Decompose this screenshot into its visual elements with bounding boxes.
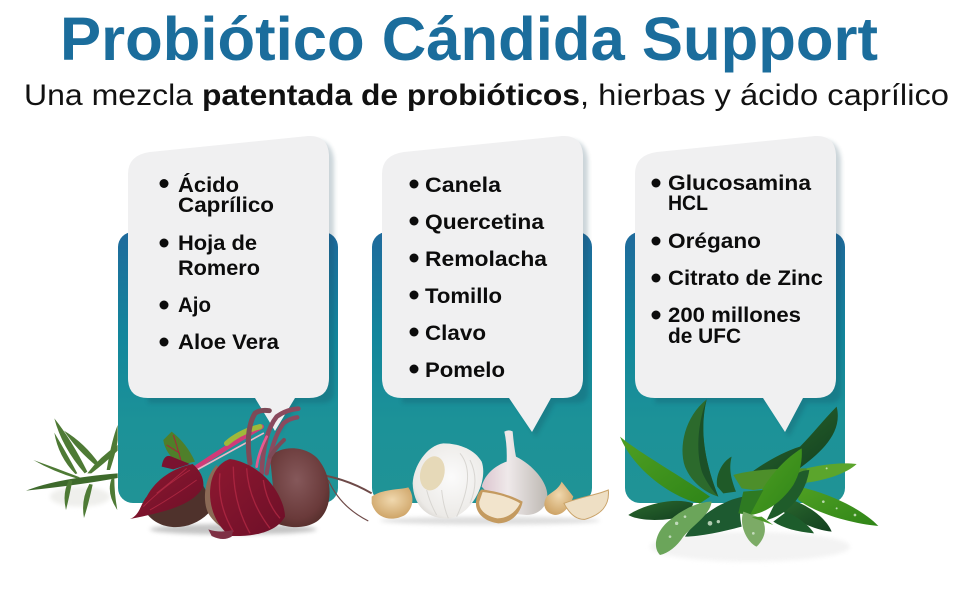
garlic clove centre: [476, 489, 523, 523]
ingredient list 3: Glucosamina: [668, 172, 811, 195]
garlic clove left: [372, 487, 412, 519]
ingredient list 3: 200 millones: [668, 304, 801, 327]
ingredient list 1: Romero: [178, 257, 260, 280]
ingredient list 3: [652, 172, 823, 348]
subtitle: , hierbas y ácido caprílico: [580, 79, 949, 112]
icon: garlic: [372, 430, 608, 525]
garlic clove right: [564, 490, 608, 519]
panel: column 1: [118, 136, 338, 503]
beet ground shadow: [150, 524, 317, 535]
ingredient list 2: Clavo: [425, 322, 486, 345]
beet stems: [195, 409, 298, 473]
ingredient list 1: Ajo: [178, 294, 211, 317]
ingredient list 1: Aloe Vera: [178, 331, 279, 354]
icon: beets: [130, 409, 372, 539]
title: Probiótico Cándida Support: [60, 5, 878, 73]
ingredient list 3: HCL: [668, 192, 708, 215]
subtitle: [24, 79, 949, 112]
ingredient list 2: Canela: [425, 174, 501, 197]
speech bubble 2: [382, 136, 583, 432]
ingredient list 2: Quercetina: [425, 211, 544, 234]
garlic clove right back: [544, 482, 573, 515]
ingredient list 3: Citrato de Zinc: [668, 267, 823, 290]
ingredient list 2: Pomelo: [425, 359, 505, 382]
beet leaf: [163, 432, 195, 465]
ingredient list 1: Caprílico: [178, 194, 274, 217]
subtitle: patentada de probióticos: [202, 79, 580, 112]
halved beet left: [147, 483, 209, 527]
panel: column 3: [625, 136, 845, 503]
subtitle: Una mezcla: [24, 79, 193, 112]
ingredient list 1: Ácido: [178, 174, 239, 197]
whole beet: [270, 448, 330, 527]
ingredient list 1: [160, 174, 279, 354]
panel: column 2: [372, 136, 592, 503]
ingredient list 1: Hoja de: [178, 232, 257, 255]
icon: aloe vera: [620, 399, 878, 562]
ingredient list 2: Remolacha: [425, 248, 547, 271]
ingredient list 2: [410, 174, 547, 382]
garlic bulb with stem: [482, 430, 547, 515]
aloe leaves: [620, 399, 878, 555]
ingredient list 3: Orégano: [668, 230, 761, 253]
ingredient list 2: Tomillo: [425, 285, 502, 308]
aloe ground shadow: [650, 532, 850, 562]
speech bubble 3: [635, 136, 836, 432]
aloe water highlights: [669, 467, 856, 538]
garlic whole bulb: [413, 443, 483, 518]
icon: rosemary sprig: [26, 418, 118, 518]
halved beet centre: [205, 465, 233, 530]
beet roots: [310, 473, 372, 493]
ingredient list 3: de UFC: [668, 325, 741, 348]
garlic ground shadow: [380, 517, 600, 525]
speech bubble 1: [128, 136, 329, 431]
